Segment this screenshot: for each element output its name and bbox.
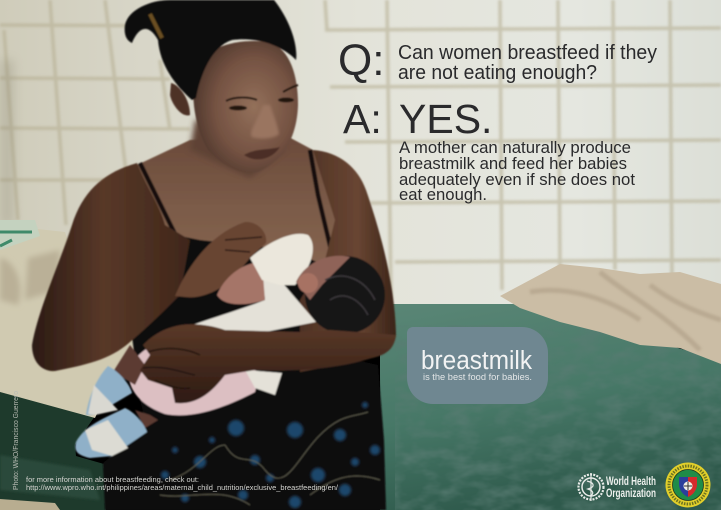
green mattress (0, 304, 721, 510)
mother's hair (125, 0, 296, 100)
answer explanation: breastmilk and feed her babies (399, 155, 627, 173)
answer explanation: adequately even if she does not (399, 171, 635, 189)
wall tiles (0, 0, 721, 330)
question text: Can women breastfeed if they (398, 42, 657, 64)
mother's right shoulder and arm (300, 150, 396, 372)
WHO wordmark (606, 476, 656, 500)
question label: Q: (338, 36, 384, 85)
callout: breastmilk is the best food (407, 327, 548, 404)
baby forearm (217, 262, 265, 304)
baby socks (75, 366, 147, 458)
answer explanation: A mother can naturally produce (399, 139, 631, 157)
mother's face (170, 41, 298, 173)
neck (190, 120, 285, 178)
baby head (296, 256, 385, 334)
bedding on the left (0, 220, 145, 418)
bedding on the right (500, 264, 721, 364)
callout subtitle: is the best food for babies. (423, 372, 532, 382)
black top and floral skirt (103, 235, 386, 510)
baby mitten (250, 234, 313, 285)
answer heading: YES. (399, 96, 492, 142)
question and answer text (338, 36, 657, 204)
answer label: A: (343, 96, 382, 142)
WHO wordmark: World Health (606, 476, 656, 488)
mother's supporting forearm and hand (140, 324, 396, 403)
answer explanation: eat enough. (399, 186, 487, 204)
more information link (26, 475, 339, 492)
mother's left arm (32, 163, 266, 371)
logo: World Health Organization (578, 473, 656, 501)
WHO emblem (578, 473, 604, 501)
photo credit: Photo: WHO/Francisco Guerrero (11, 391, 20, 490)
information line: for more information about breastfeeding, check out: (26, 475, 199, 484)
WHO wordmark: Organization (606, 488, 656, 500)
logo: Philippine Department of Health seal (666, 462, 710, 508)
mother's chest and straps (125, 135, 340, 270)
question text: are not eating enough? (398, 62, 597, 84)
baby clothes (165, 275, 316, 340)
baby legs and diaper (128, 336, 260, 415)
url line: http://www.wpro.who.int/philippines/areas/maternal_child_nutrition/exclusive_breastfeeding/en/ (26, 483, 339, 492)
callout title: breastmilk (421, 347, 532, 375)
gown tail (245, 370, 282, 395)
newborn baby (75, 234, 385, 458)
mother and baby figures (32, 0, 396, 510)
